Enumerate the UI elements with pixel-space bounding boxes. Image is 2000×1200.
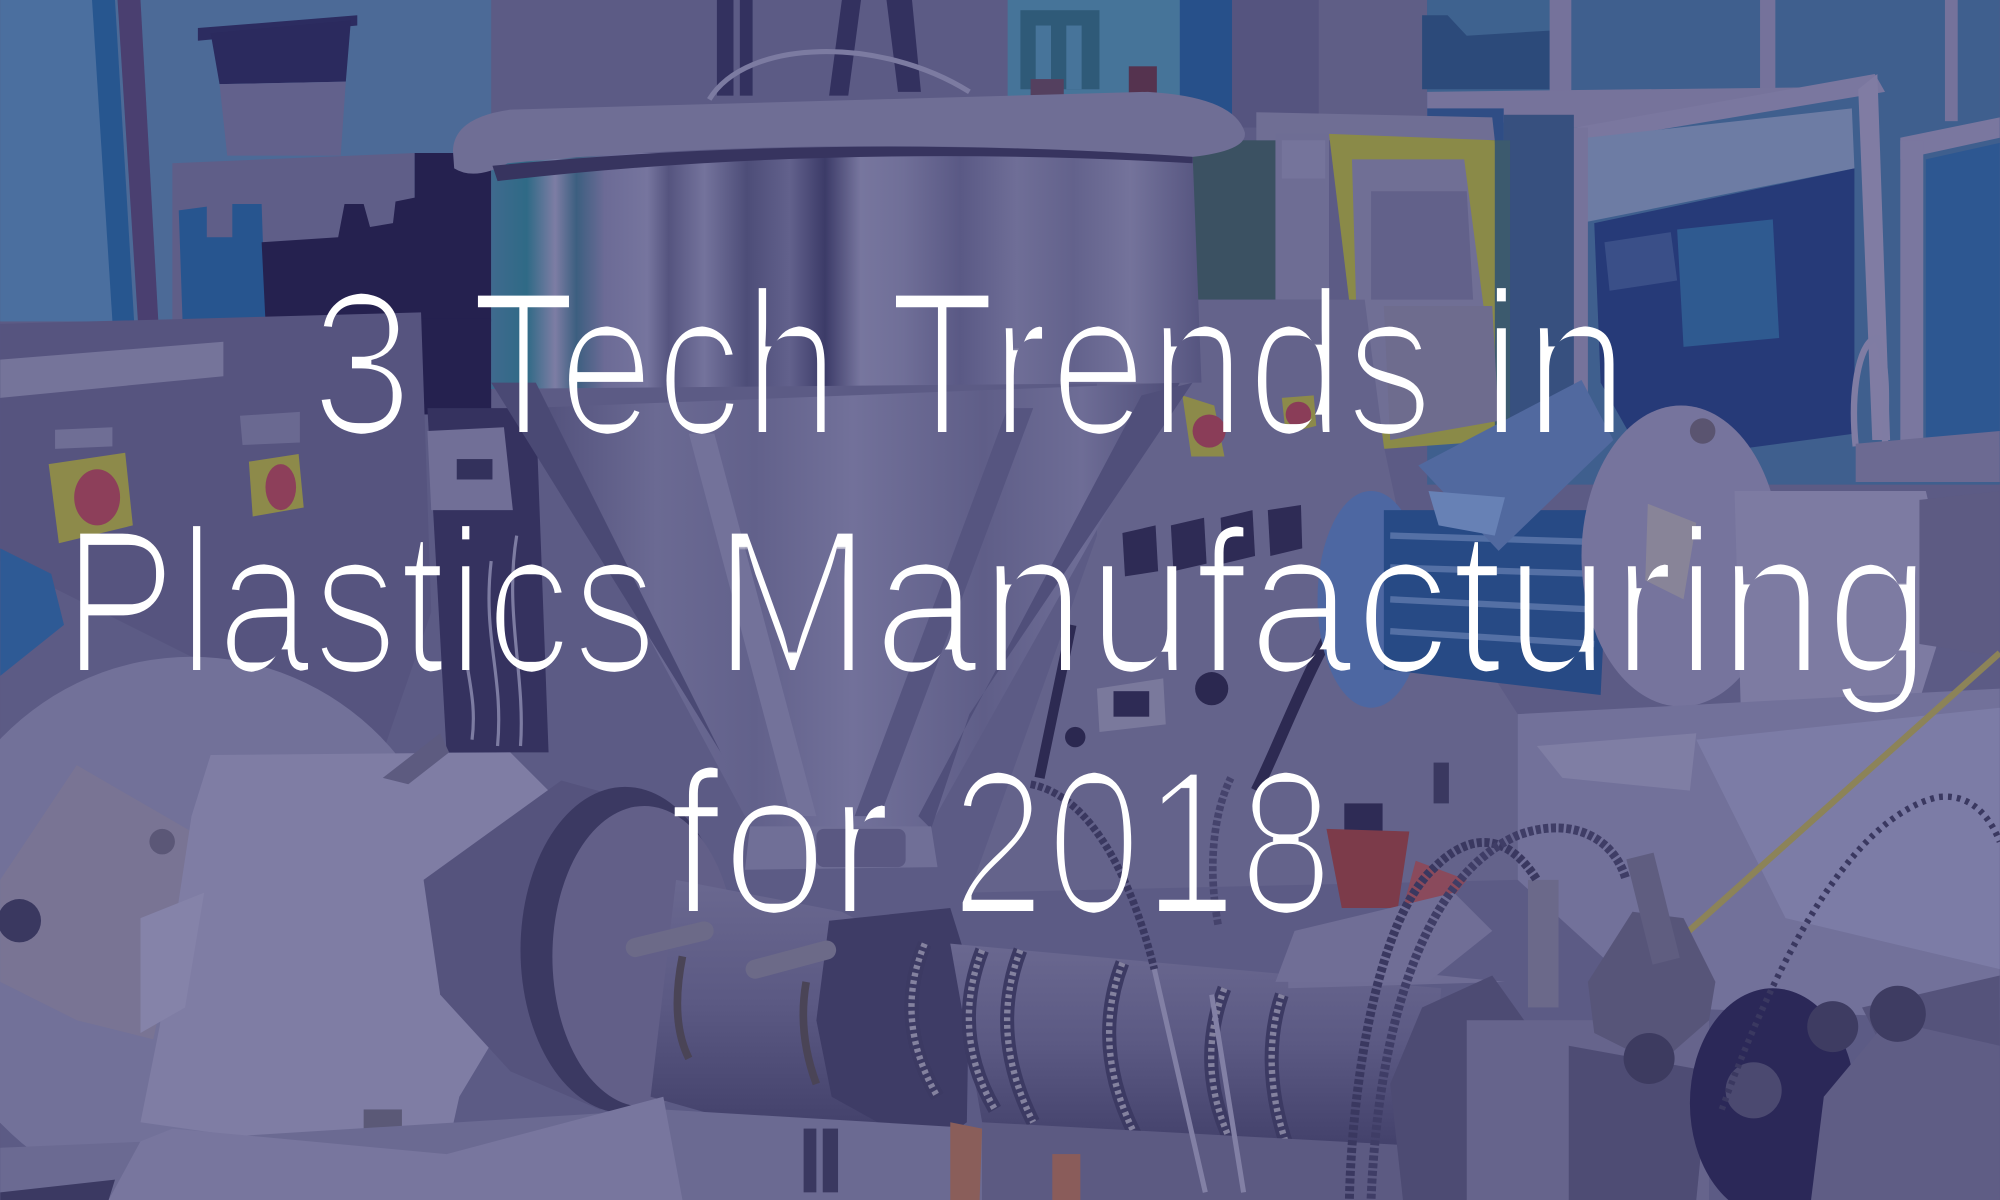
title line 2: Manufacturing [712,488,1932,716]
sprung thermocouple cables [1031,778,2000,1199]
base plate and floor under machine [0,1097,1454,1200]
title line 3 [668,729,1334,957]
title line 2 [62,488,1932,716]
lower right table and yellow tube [1518,653,2000,1020]
centre pipes and cable above hopper [709,0,969,99]
control cabinet with yellow door [1193,112,1510,449]
title line 1: 3 [310,250,414,478]
hopper: stainless bin, cone and collar [453,92,1245,870]
left control panel with yellow switches [0,312,431,752]
title line 3: for [668,729,892,957]
dark wiring cavity [415,319,549,752]
extruder feed barrels [424,780,969,1154]
big disc and bearing block [0,657,555,1200]
window behind hopper [1008,0,1427,140]
title line 1: Trends [888,250,1434,478]
oil pot and red container [1326,763,1467,912]
title line 2: Plastics [62,488,658,716]
heated barrel with hose clamps [911,893,1505,1167]
title line 1: Tech [470,250,840,478]
round plate and gearbox at right [1582,406,2000,721]
right machine flanges and bolts [1390,853,2000,1200]
title line 1: in [1480,250,1630,478]
motor with blue fins [1318,380,1613,708]
left window with frame and bucket [0,0,491,321]
title line 3: 2018 [950,729,1334,957]
title line 1 [310,250,1630,478]
right windows and frames [1422,0,2000,485]
large machine panel with switches and displays [969,300,1518,893]
